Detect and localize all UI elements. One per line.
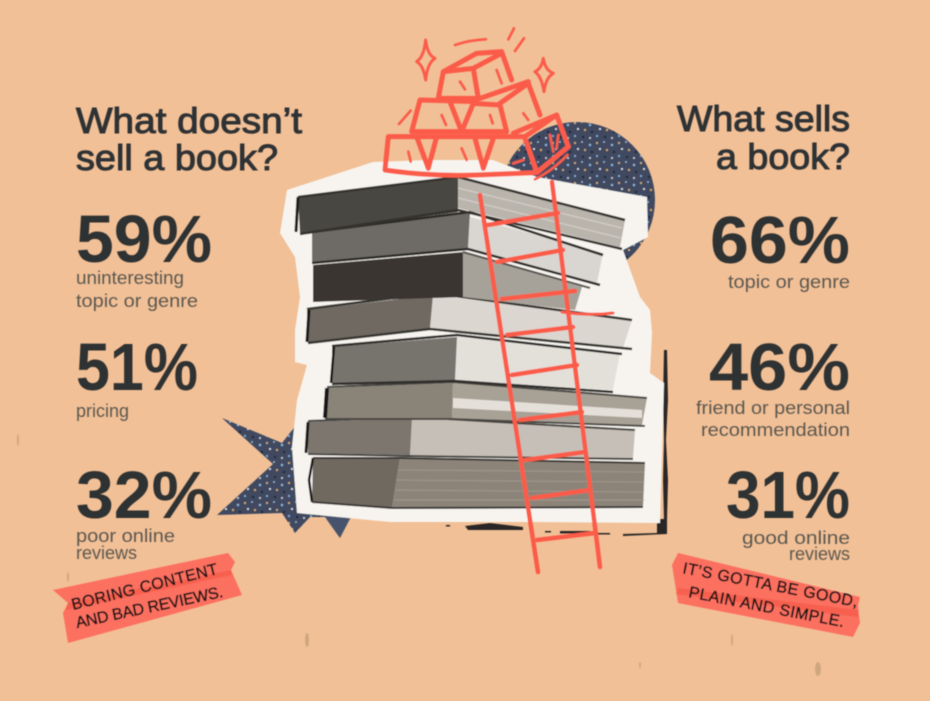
right heading: a book?	[716, 136, 850, 177]
stat: 51%: 51%	[76, 330, 198, 405]
book 8	[309, 458, 645, 508]
stat: 46%: recommendation	[701, 420, 850, 440]
stat: 32%: 32%	[76, 458, 212, 533]
right heading: What sells	[677, 98, 850, 139]
book 3	[313, 252, 590, 310]
stat: 66%: topic or genre	[728, 272, 850, 292]
stat: 31%	[726, 458, 850, 564]
right heading	[677, 98, 850, 177]
stat: 46%: 46%	[709, 330, 850, 405]
stat: 32%: poor online	[76, 526, 175, 546]
left heading	[76, 100, 302, 178]
book 2	[312, 212, 603, 285]
book 6	[325, 382, 647, 426]
book stack	[296, 177, 647, 508]
callout tape: right: IT’S GOTTA BE GOOD,	[681, 560, 859, 611]
stat: 46%: friend or personal	[696, 398, 850, 418]
callout tape: right: PLAIN AND SIMPLE.	[687, 584, 846, 631]
glitter star	[217, 418, 340, 538]
paper specks	[17, 434, 821, 676]
ladder	[480, 182, 613, 572]
left heading: sell a book?	[76, 137, 278, 178]
stat: 32%: reviews	[76, 543, 137, 563]
book 7	[306, 417, 635, 459]
book 5	[331, 335, 622, 392]
small glitter triangle	[320, 510, 352, 538]
dark brush edge	[446, 350, 668, 536]
callout tape: left: AND BAD REVIEWS.	[74, 584, 225, 632]
stat: 59%: topic or genre	[76, 291, 198, 311]
stat: 66%: 66%	[710, 203, 850, 278]
stat: 59%	[76, 202, 212, 311]
torn white paper behind books	[280, 160, 664, 523]
stat: 59%: uninteresting	[76, 268, 184, 288]
stat: 46%	[696, 330, 850, 440]
stat: 31%: 31%	[726, 458, 850, 533]
callout tape: left: BORING CONTENT	[70, 561, 220, 614]
stat: 31%: good online	[742, 528, 850, 548]
book 1	[296, 177, 625, 249]
callout tape: right	[672, 553, 860, 637]
stat: 59%: 59%	[76, 202, 212, 277]
left heading: What doesn’t	[76, 100, 302, 141]
stat: 51%: pricing	[76, 401, 129, 421]
gold bars drawing	[385, 28, 568, 179]
stat: 31%: reviews	[789, 544, 850, 564]
callout tape: left	[53, 553, 242, 643]
glitter circle	[499, 122, 655, 278]
book 4	[307, 293, 632, 349]
